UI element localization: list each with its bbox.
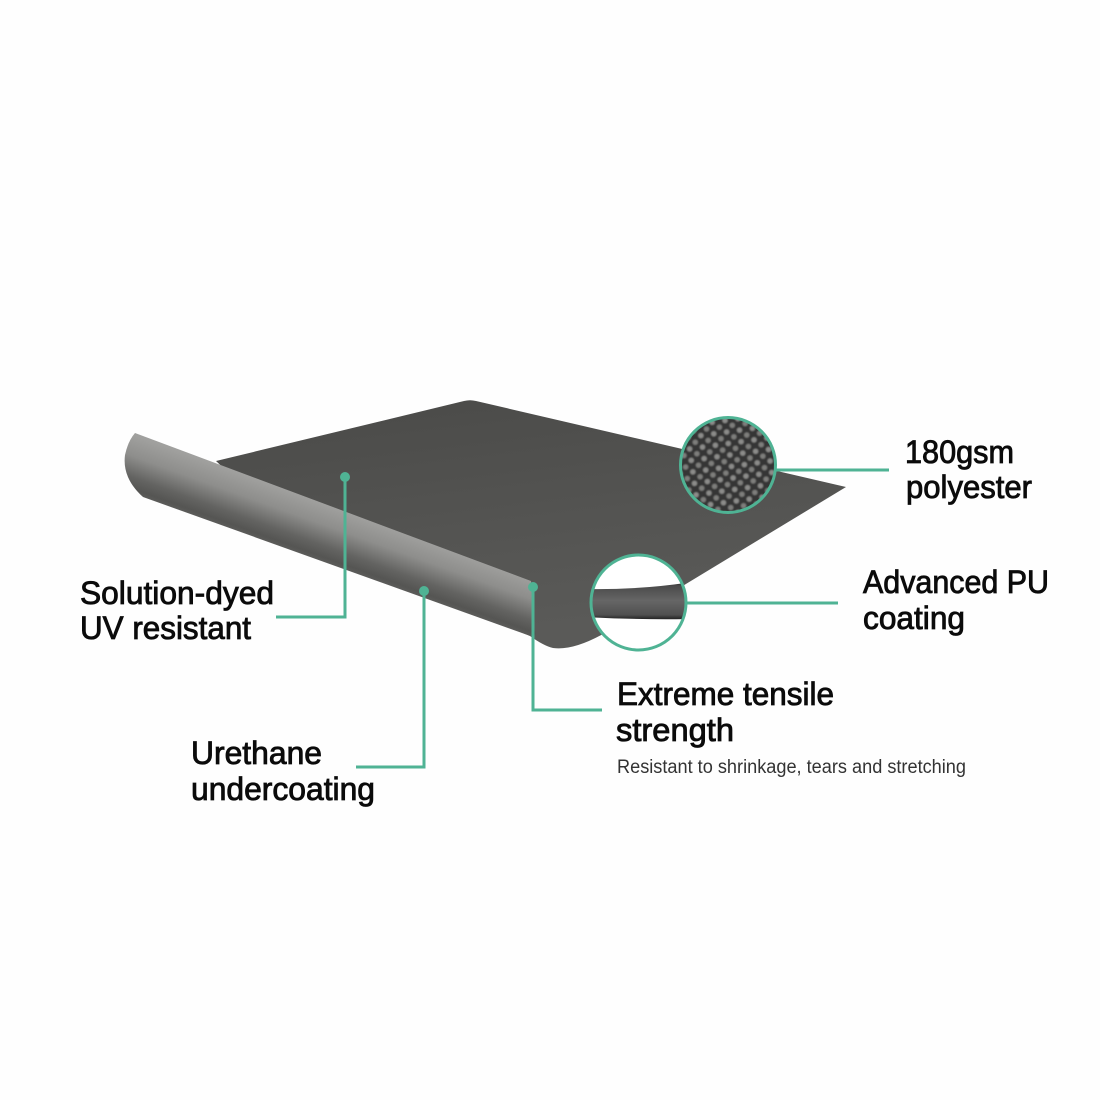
magnifier: coating cross section	[585, 555, 692, 650]
label: 180gsm	[905, 434, 1014, 470]
callout: Advanced PU coating	[585, 555, 1049, 650]
leader line	[686, 602, 838, 604]
magnifier: woven texture	[679, 416, 777, 514]
marker dot	[419, 586, 429, 596]
label: undercoating	[191, 771, 375, 807]
callout: 180gsm polyester	[675, 412, 1032, 518]
leader line	[276, 477, 345, 617]
leader line	[533, 587, 602, 710]
label: coating	[863, 600, 965, 636]
label: Extreme tensile	[617, 676, 834, 712]
marker dot	[528, 582, 538, 592]
callout: Solution-dyed UV resistant	[80, 472, 350, 646]
description: Resistant to shrinkage, tears and stretching	[617, 757, 966, 778]
label: strength	[616, 712, 734, 748]
label: Urethane	[191, 735, 322, 771]
label: Solution-dyed	[80, 575, 274, 611]
callout: Extreme tensile strength	[528, 582, 966, 778]
label: Advanced PU	[863, 564, 1049, 600]
leader line	[356, 591, 424, 767]
rolled edge	[125, 433, 536, 638]
label: polyester	[906, 469, 1032, 505]
callout: Urethane undercoating	[191, 586, 429, 807]
flat sheet	[216, 400, 846, 648]
fabric sheet illustration	[125, 400, 846, 648]
marker dot	[340, 472, 350, 482]
leader line	[776, 468, 889, 472]
label: UV resistant	[80, 610, 251, 646]
